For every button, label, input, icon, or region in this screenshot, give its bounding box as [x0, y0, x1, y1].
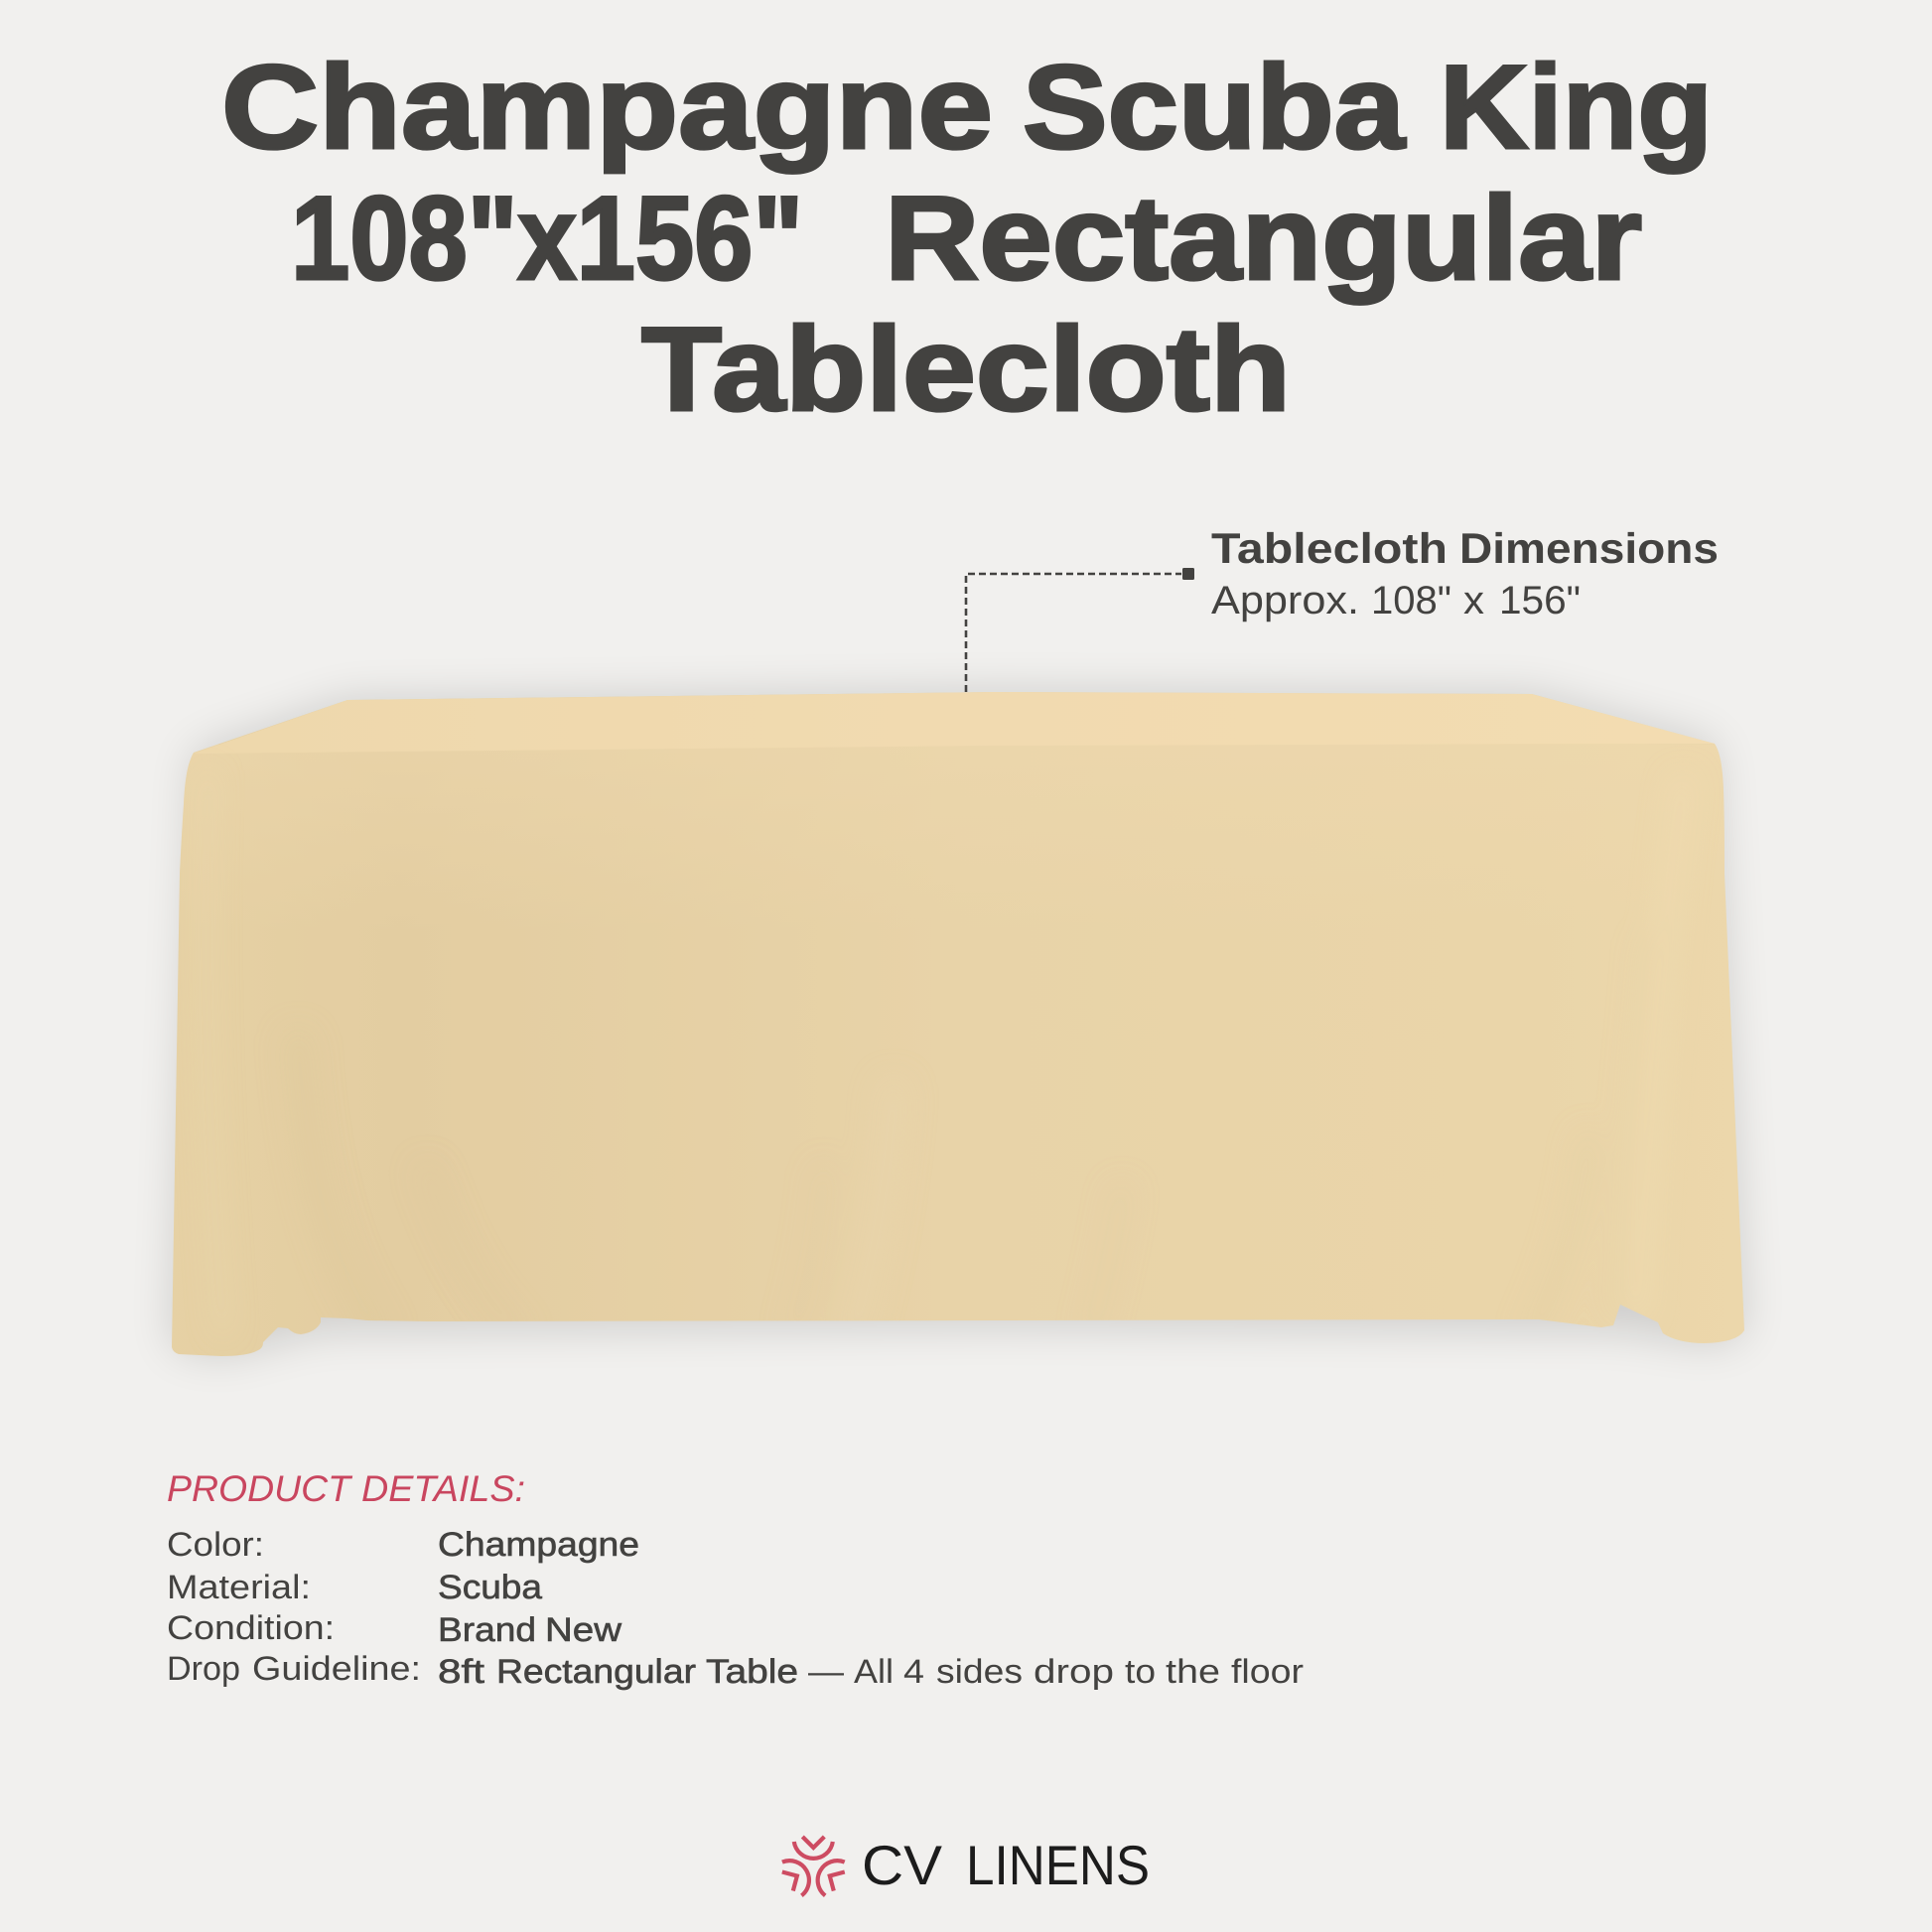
row values: All: [854, 1653, 894, 1691]
title: [221, 41, 1713, 436]
row values: floor: [1231, 1653, 1304, 1691]
logo wordmark: LINENS: [966, 1834, 1150, 1896]
table top face: [220, 692, 1599, 745]
row values: Scuba: [438, 1569, 542, 1606]
cloth shadow: [172, 692, 1744, 1356]
callout: tablecloth dimensions text: 156": [1499, 579, 1581, 622]
cloth body: [159, 685, 1757, 1370]
logo wordmark: [862, 1834, 1150, 1896]
row values: New: [545, 1611, 621, 1649]
row values: sides: [936, 1653, 1023, 1691]
row labels: Material:: [167, 1569, 311, 1606]
row labels: [167, 1526, 421, 1688]
row values: the: [1166, 1653, 1220, 1691]
callout: tablecloth dimensions text: Approx.: [1211, 579, 1359, 622]
callout: tablecloth dimensions text: [1211, 525, 1719, 622]
row values: [438, 1526, 1304, 1691]
title: King: [1440, 41, 1713, 174]
callout: tablecloth dimensions text: x: [1463, 579, 1484, 622]
row labels: Drop: [167, 1650, 240, 1688]
title: 108"x156": [291, 172, 803, 305]
row values: Table: [706, 1653, 798, 1691]
title: Tablecloth: [641, 303, 1291, 436]
heading: product details: [167, 1468, 525, 1509]
callout: tablecloth dimensions text: 108": [1371, 579, 1451, 622]
row values: Brand: [438, 1611, 536, 1649]
row values: drop: [1034, 1653, 1114, 1691]
row values: —: [808, 1653, 844, 1691]
row values: to: [1125, 1653, 1156, 1691]
title: Scuba: [1023, 41, 1406, 174]
callout: tablecloth dimensions text: Tablecloth: [1211, 525, 1448, 573]
logo: CV Linens: [778, 1834, 1150, 1898]
product details: [167, 1468, 1304, 1691]
icon: logo mark: [778, 1837, 849, 1898]
row values: 4: [903, 1653, 924, 1691]
row values: 8ft: [438, 1653, 485, 1691]
title: Champagne: [221, 41, 993, 174]
tablecloth illustration: [159, 685, 1757, 1370]
heading: product details: DETAILS:: [361, 1468, 525, 1509]
drape folds: [206, 774, 1683, 1330]
row labels: Color:: [167, 1526, 264, 1564]
row labels: Condition:: [167, 1609, 335, 1647]
callout: tablecloth dimensions text: Dimensions: [1459, 525, 1719, 573]
row values: Rectangular: [496, 1653, 696, 1691]
row values: Champagne: [438, 1526, 639, 1564]
callout: dimensions leader line: [966, 568, 1194, 692]
logo wordmark: CV: [862, 1834, 943, 1896]
title: Rectangular: [885, 172, 1642, 305]
row labels: Guideline:: [252, 1650, 421, 1688]
heading: product details: PRODUCT: [167, 1468, 352, 1509]
